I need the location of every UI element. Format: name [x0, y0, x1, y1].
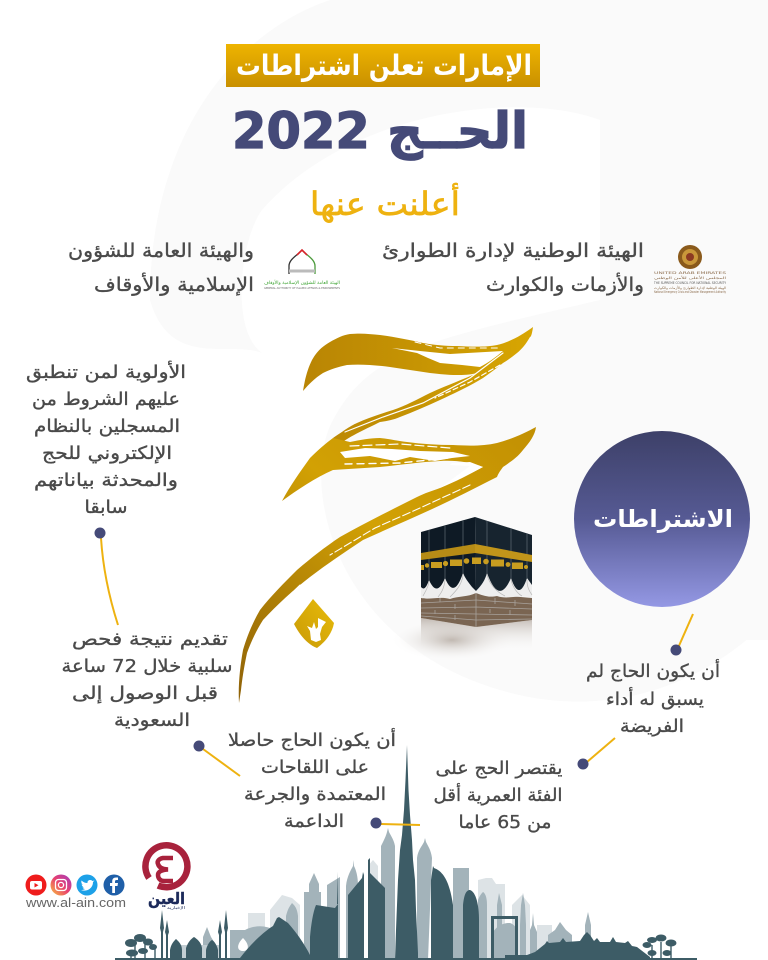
icon: al-ain logo: العين — [148, 889, 185, 908]
connector 1 — [670, 614, 693, 656]
social icons — [26, 874, 124, 896]
logo: supreme council: National Emergency Crisis and Disaster Management Authority — [654, 290, 726, 294]
condition 2: الفئة العمرية أقل — [434, 783, 562, 806]
logo: supreme council: THE SUPREME COUNCIL FOR NATIONAL SECURITY — [653, 281, 727, 285]
main title: الحــج 2022 — [232, 102, 528, 161]
connector 2 — [578, 738, 615, 770]
dark buildings — [115, 745, 697, 960]
subtitle: أعلنت عنها — [310, 183, 460, 223]
condition 5: المسجلين بالنظام — [34, 416, 180, 437]
icon: instagram — [50, 874, 72, 896]
condition 1: الفريضة — [620, 716, 684, 737]
condition 4: سلبية خلال 72 ساعة — [61, 656, 232, 677]
title banner: الإمارات تعلن اشتراطات — [236, 49, 532, 82]
organisation: emergency authority — [382, 240, 644, 296]
condition 4 — [61, 629, 232, 731]
website: www.al-ain.com — [25, 895, 126, 910]
condition 5: والمحدثة بياناتهم — [34, 470, 178, 491]
condition 3: الداعمة — [284, 811, 344, 832]
logo: islamic affairs authority: GENERAL AUTHORITY OF ISLAMIC AFFAIRS & ENDOWMENTS — [264, 286, 340, 290]
condition 2: من 65 عاما — [458, 812, 552, 833]
condition 4: قبل الوصول إلى — [72, 683, 218, 704]
middle stroke — [239, 427, 536, 703]
icon: youtube — [26, 874, 46, 896]
white brush gaps — [306, 348, 503, 641]
icon: al-ain logo: الإخبارية — [167, 905, 185, 911]
condition 1: أن يكون الحاج لم — [586, 659, 720, 682]
mid buildings — [180, 828, 591, 960]
logo: supreme council: UNITED ARAB EMIRATES — [654, 271, 726, 275]
background watermark — [150, 0, 768, 702]
organisation: emergency authority: الهيئة الوطنية لإدارة الطوارئ — [382, 240, 644, 262]
condition 3: أن يكون الحاج حاصلا — [228, 728, 396, 751]
logo: islamic affairs authority — [264, 250, 340, 290]
icon: al-ain logo — [145, 845, 187, 911]
condition 5: الأولوية لمن تنطبق — [26, 361, 186, 383]
connector 5 — [94, 528, 118, 625]
organisation: emergency authority: والأزمات والكوارث — [486, 273, 644, 296]
logo: supreme council: المجلس الأعلى للأمن الوطني — [654, 275, 726, 280]
conditions circle — [574, 431, 750, 607]
icon: facebook — [104, 874, 124, 896]
logo: supreme council: الهيئة الوطنية لإدارة الطوارئ والأزمات والكوارث — [654, 285, 726, 291]
calligraphy: hajj — [239, 327, 536, 703]
kaaba — [390, 517, 532, 661]
condition 5: عليهم الشروط من — [32, 389, 180, 410]
icon: twitter — [76, 874, 98, 896]
organisation: islamic affairs: الإسلامية والأوقاف — [94, 273, 254, 296]
condition 4: تقديم نتيجة فحص — [72, 629, 228, 650]
organisation: islamic affairs — [68, 240, 254, 296]
conditions circle: الاشتراطات — [593, 505, 733, 533]
skyline — [115, 745, 697, 960]
top stroke with diagonal — [303, 327, 533, 444]
condition 3: على اللقاحات — [261, 757, 369, 778]
condition 3 — [228, 728, 396, 832]
palms — [125, 934, 676, 960]
condition 1 — [586, 659, 720, 737]
connector 3 — [370, 818, 420, 828]
organisation: islamic affairs: والهيئة العامة للشؤون — [68, 240, 254, 262]
light buildings — [248, 860, 552, 960]
condition 2: يقتصر الحج على — [436, 758, 562, 779]
condition 5: سابقا — [84, 497, 128, 518]
condition 1: يسبق له أداء — [606, 687, 704, 710]
diamond dot — [294, 599, 334, 648]
condition 3: المعتمدة والجرعة — [244, 784, 386, 805]
logo: islamic affairs authority: الهيئة العامة للشؤون الإسلامية والأوقاف — [264, 279, 340, 286]
connector 4 — [194, 740, 240, 776]
condition 5: الإلكتروني للحج — [42, 443, 172, 464]
condition 4: السعودية — [114, 710, 190, 731]
condition 2 — [434, 758, 562, 833]
logo: supreme council — [653, 245, 727, 294]
condition 5 — [26, 361, 186, 518]
title banner — [226, 44, 540, 87]
